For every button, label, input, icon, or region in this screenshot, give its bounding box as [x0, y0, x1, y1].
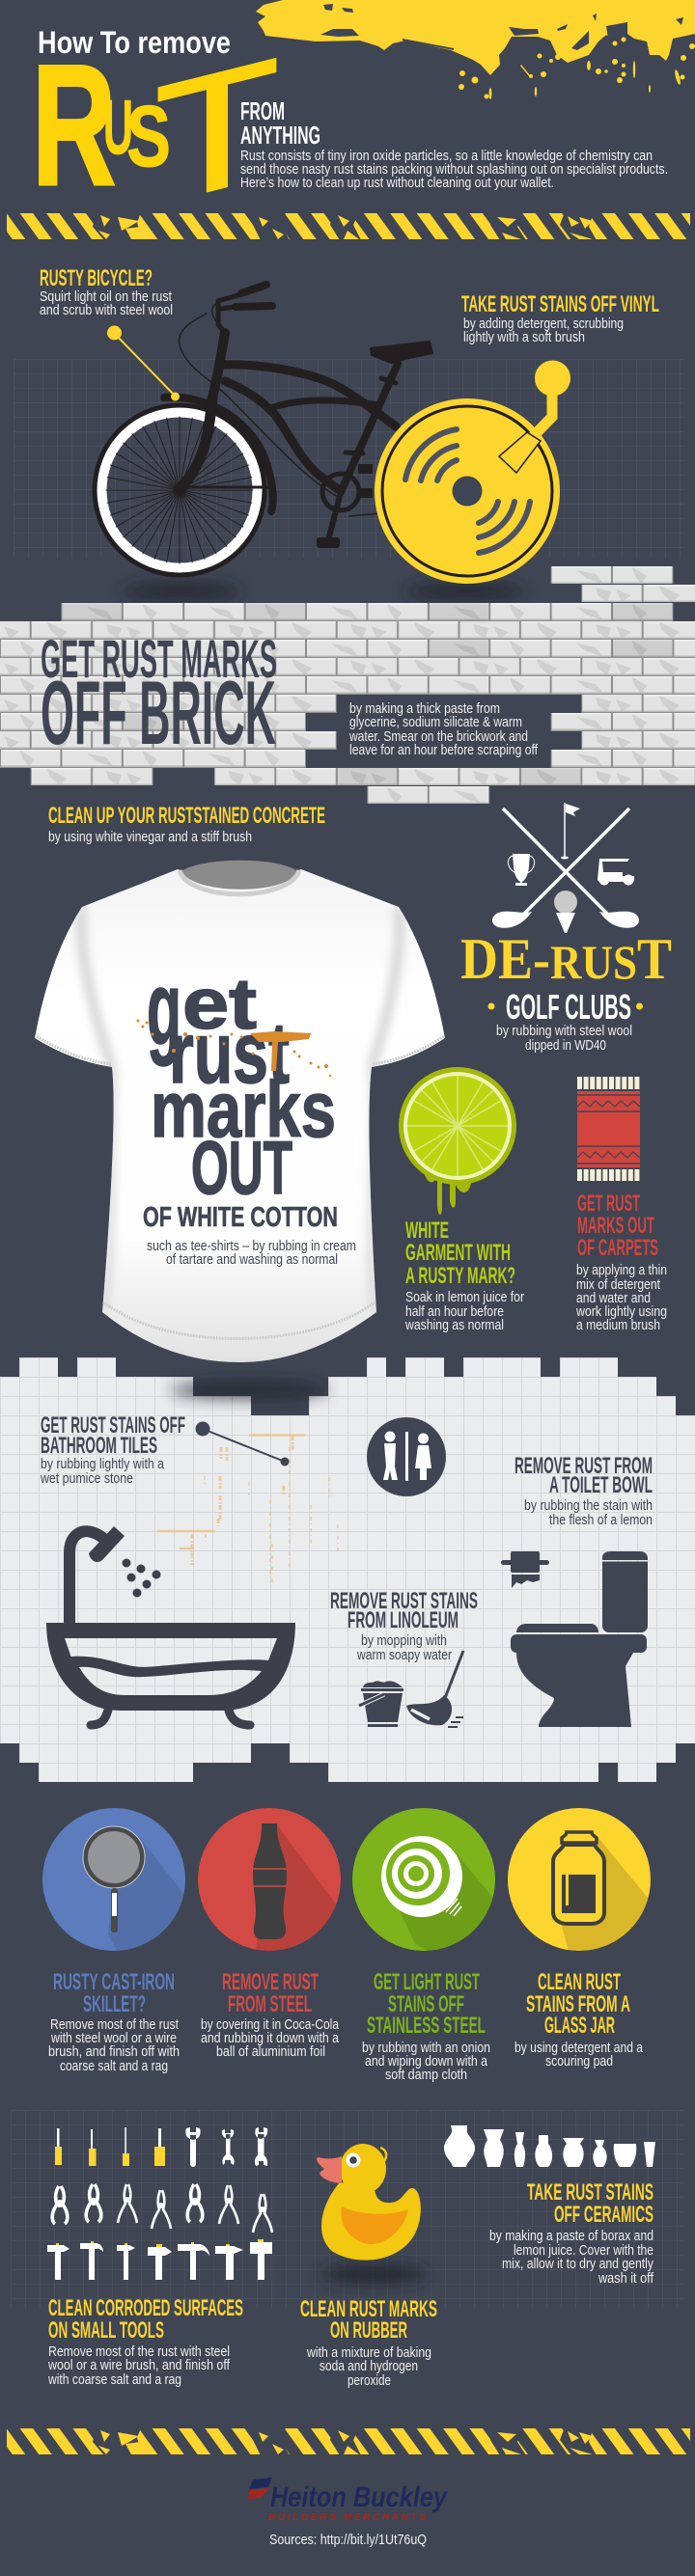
steel text — [201, 1969, 340, 2060]
steel text: REMOVE RUST — [222, 1969, 319, 1995]
logo: heiton buckley: Heiton Buckley — [270, 2481, 448, 2513]
stainless steel text — [362, 1969, 490, 2083]
small tools text: Remove most of the rust with steel — [48, 2343, 230, 2360]
small tools text: CLEAN CORRODED SURFACES — [48, 2295, 243, 2321]
concrete text: CLEAN UP YOUR RUSTSTAINED CONCRETE — [48, 803, 325, 829]
tub — [46, 1623, 295, 1711]
circle: coca-cola bottle — [198, 1808, 341, 1951]
linoleum text: REMOVE RUST STAINS — [330, 1588, 478, 1614]
text: GET RUST MARKS — [41, 628, 277, 689]
tonearm — [499, 361, 570, 473]
skillet text: coarse salt and a rag — [60, 2058, 168, 2074]
concrete text — [48, 803, 325, 845]
circle: onion — [352, 1808, 495, 1951]
title: from anything — [240, 96, 320, 150]
intro text — [240, 148, 668, 191]
tile panel — [0, 1357, 695, 1782]
carpets text: a medium brush — [576, 1317, 660, 1333]
toilet text — [514, 1453, 653, 1528]
chainring — [322, 474, 359, 510]
handlebar — [180, 301, 340, 498]
icons: hammers — [47, 2239, 272, 2280]
ceramics text: lemon juice. Cover with the — [514, 2242, 653, 2259]
rubber text: CLEAN RUST MARKS — [300, 2296, 437, 2322]
skillet text: brush, and finish off with — [48, 2043, 180, 2060]
carpets text: mix of detergent — [576, 1276, 661, 1293]
trophy — [513, 854, 530, 886]
carpets text: GET RUST — [577, 1191, 640, 1217]
toilet text: the flesh of a lemon — [549, 1512, 653, 1528]
skillet text: RUSTY CAST-IRON — [53, 1969, 175, 1995]
rusty bicycle text: Squirt light oil on the rust — [40, 288, 173, 305]
glass jar text: scouring pad — [545, 2053, 613, 2069]
shirt lettering: rust — [169, 1005, 290, 1102]
shirt shading — [81, 907, 400, 1312]
de-rust title: DE-RUST — [460, 927, 672, 991]
grid backdrop 2 — [11, 2110, 683, 2309]
vinyl record — [375, 361, 570, 584]
carpets text: by applying a thin — [576, 1262, 667, 1278]
ceramics text: wash it off — [598, 2270, 654, 2287]
golf clubs heading — [488, 987, 643, 1054]
white garment text: half an hour before — [405, 1303, 504, 1320]
logo: heiton buckley: BUILDERS MERCHANTS — [268, 2512, 426, 2523]
golf icon — [492, 803, 639, 933]
hem stitching — [37, 1036, 444, 1339]
brick wall — [0, 566, 695, 804]
drops — [122, 1559, 160, 1598]
rubber text: soda and hydrogen — [320, 2358, 418, 2374]
icon: mop and bucket — [359, 1651, 463, 1727]
paint splat — [256, 0, 695, 99]
rust stains on tiles — [157, 1436, 338, 1582]
golf clubs heading: dipped in WD40 — [525, 1037, 606, 1054]
rubber text — [300, 2296, 437, 2389]
fender — [164, 397, 273, 511]
icons: ceramics — [444, 2125, 655, 2167]
white garment text: washing as normal — [404, 1317, 504, 1333]
shirt lettering — [143, 949, 338, 1233]
feet — [91, 1706, 250, 1725]
concrete text: by using white vinegar and a stiff brush — [48, 829, 252, 845]
skillet text: with steel wool or a wire — [50, 2030, 177, 2046]
rusty bicycle text — [40, 265, 173, 318]
brick heading — [41, 628, 277, 763]
stainless steel text: by rubbing with an onion — [362, 2040, 490, 2056]
carpets text — [575, 1191, 667, 1333]
toilet text: by rubbing the stain with — [524, 1497, 653, 1514]
stainless steel text: STAINS OFF — [388, 1991, 464, 2017]
skillet text — [48, 1969, 180, 2074]
circle: cast-iron skillet — [42, 1808, 185, 1951]
icons: pliers — [52, 2184, 272, 2233]
lime — [399, 1067, 516, 1215]
glass jar text — [514, 1969, 644, 2069]
ceramics text: mix, allow it to dry and gently — [502, 2256, 653, 2272]
golf cart — [598, 859, 634, 884]
bicycle — [95, 285, 432, 575]
brick text: water. Smear on the brickwork and — [348, 728, 528, 745]
pointer: tiles — [195, 1422, 290, 1466]
carpets text: work lightly using — [575, 1303, 667, 1320]
vinyl text — [461, 291, 659, 345]
golf clubs heading: by rubbing with steel wool — [496, 1023, 632, 1039]
duck shadow — [321, 2265, 428, 2283]
carpets text: and water and — [576, 1290, 651, 1306]
t-shirt shadow — [170, 1382, 328, 1399]
hazard stripe band — [7, 212, 690, 240]
circle: glass jar — [508, 1808, 651, 1951]
shirt text: such as tee-shirts – by rubbing in cream — [147, 1238, 356, 1254]
title: from anything: FROM — [240, 96, 285, 125]
t-shirt — [35, 861, 445, 1362]
bathroom text: GET RUST STAINS OFF — [41, 1412, 185, 1439]
logo: heiton buckley — [248, 2478, 448, 2523]
rusty bicycle text: and scrub with steel wool — [40, 302, 173, 318]
fork and frame — [212, 333, 225, 398]
glass jar text: by using detergent and a — [514, 2040, 644, 2056]
vinyl text: by adding detergent, scrubbing — [463, 315, 624, 332]
shirt lettering: marks — [151, 1066, 336, 1154]
shirt lettering: et — [182, 964, 257, 1044]
linoleum text — [330, 1588, 478, 1663]
bathroom text: wet pumice stone — [40, 1470, 133, 1487]
white garment text — [404, 1218, 524, 1333]
rubber text: peroxide — [348, 2372, 391, 2389]
white garment text: Soak in lemon juice for — [405, 1289, 524, 1305]
drips — [422, 1167, 483, 1215]
shirt text: of tartare and washing as normal — [166, 1251, 338, 1268]
steel text: by covering it in Coca-Cola — [201, 2016, 340, 2033]
title: rust — [32, 22, 280, 240]
icons: wrenches — [185, 2127, 267, 2167]
shirt lettering: OUT — [191, 1125, 292, 1210]
stainless steel text: soft damp cloth — [385, 2067, 467, 2083]
clubs — [503, 808, 629, 917]
small tools text: with coarse salt and a rag — [47, 2371, 181, 2388]
hazard stripe band bottom — [7, 2427, 690, 2455]
brick text: by making a thick paste from — [349, 700, 500, 717]
stainless steel text: STAINLESS STEEL — [367, 2013, 486, 2039]
linoleum text: warm soapy water — [356, 1647, 452, 1663]
brick text: glycerine, sodium silicate & warm — [349, 714, 522, 730]
white garment text: GARMENT WITH — [405, 1240, 511, 1266]
title: rust: T — [154, 22, 280, 240]
rusty bicycle text: RUSTY BICYCLE? — [40, 265, 153, 291]
ceramics text: by making a paste of borax and — [489, 2228, 653, 2244]
header — [32, 0, 695, 240]
shower — [70, 1531, 106, 1624]
toilet paper — [501, 1551, 549, 1588]
shadows under bike and record — [122, 584, 525, 599]
glass jar text: CLEAN RUST — [538, 1969, 621, 1995]
bathroom text — [40, 1412, 185, 1487]
icon: restroom sign — [367, 1417, 446, 1496]
title: from anything: ANYTHING — [240, 121, 320, 150]
glass jar text: GLASS JAR — [544, 2013, 615, 2039]
rubber text: ON RUBBER — [330, 2317, 407, 2343]
shirt lettering: OF WHITE COTTON — [143, 1202, 338, 1233]
rubber text: with a mixture of baking — [306, 2344, 431, 2361]
white garment text: WHITE — [405, 1218, 449, 1244]
title: rust: S — [126, 89, 171, 185]
vinyl text: lightly with a soft brush — [463, 329, 585, 345]
intro text: Here’s how to clean up rust without cleaning out your wallet. — [240, 175, 554, 191]
linoleum text: FROM LINOLEUM — [348, 1607, 459, 1633]
rust mark — [137, 1019, 331, 1077]
ball and tee — [554, 891, 577, 914]
skillet text: SKILLET? — [83, 1991, 146, 2017]
shirt text — [147, 1238, 356, 1268]
wheel — [95, 405, 267, 575]
shirt body — [35, 869, 445, 1362]
title: rust: R — [32, 29, 116, 221]
flag — [564, 803, 566, 857]
ceramics text — [489, 2179, 654, 2287]
bathroom text: BATHROOM TILES — [41, 1433, 157, 1459]
steel text: FROM STEEL — [228, 1991, 312, 2017]
splat holes — [320, 4, 683, 50]
skillet text: Remove most of the rust — [50, 2016, 180, 2033]
brick text — [348, 700, 539, 758]
sources: Sources: http://bit.ly/1Ut76uQ — [269, 2532, 427, 2548]
saddle — [371, 342, 432, 363]
stainless steel text: and wiping down with a — [365, 2053, 488, 2069]
white garment text: A RUSTY MARK? — [405, 1263, 515, 1289]
text: OFF BRICK — [41, 662, 276, 763]
brick text: leave for an hour before scraping off — [349, 742, 539, 758]
small tools text — [47, 2295, 243, 2388]
collar — [180, 861, 299, 894]
logo flag — [248, 2478, 272, 2499]
grid backdrop — [14, 359, 684, 558]
shirt lettering: g — [147, 949, 181, 1066]
title: how to remove: How To remove — [38, 25, 231, 60]
icons: screwdrivers — [55, 2127, 165, 2166]
icon: bath — [46, 1526, 295, 1725]
bathroom text: by rubbing lightly with a — [41, 1456, 165, 1472]
linoleum text: by mopping with — [361, 1632, 447, 1649]
title: rust: U — [103, 84, 133, 170]
stainless steel text: GET LIGHT RUST — [374, 1969, 480, 1995]
icon: toilet — [501, 1551, 648, 1727]
icon: rubber duck — [317, 2144, 421, 2261]
small tools text: ON SMALL TOOLS — [48, 2317, 164, 2343]
steel text: and rubbing it down with a — [201, 2030, 340, 2046]
small tools text: wool or a wire brush, and finish off — [47, 2357, 231, 2373]
pointer: bicycle — [107, 326, 180, 401]
carpet icon — [577, 1077, 640, 1181]
steel text: ball of aluminium foil — [216, 2043, 325, 2060]
